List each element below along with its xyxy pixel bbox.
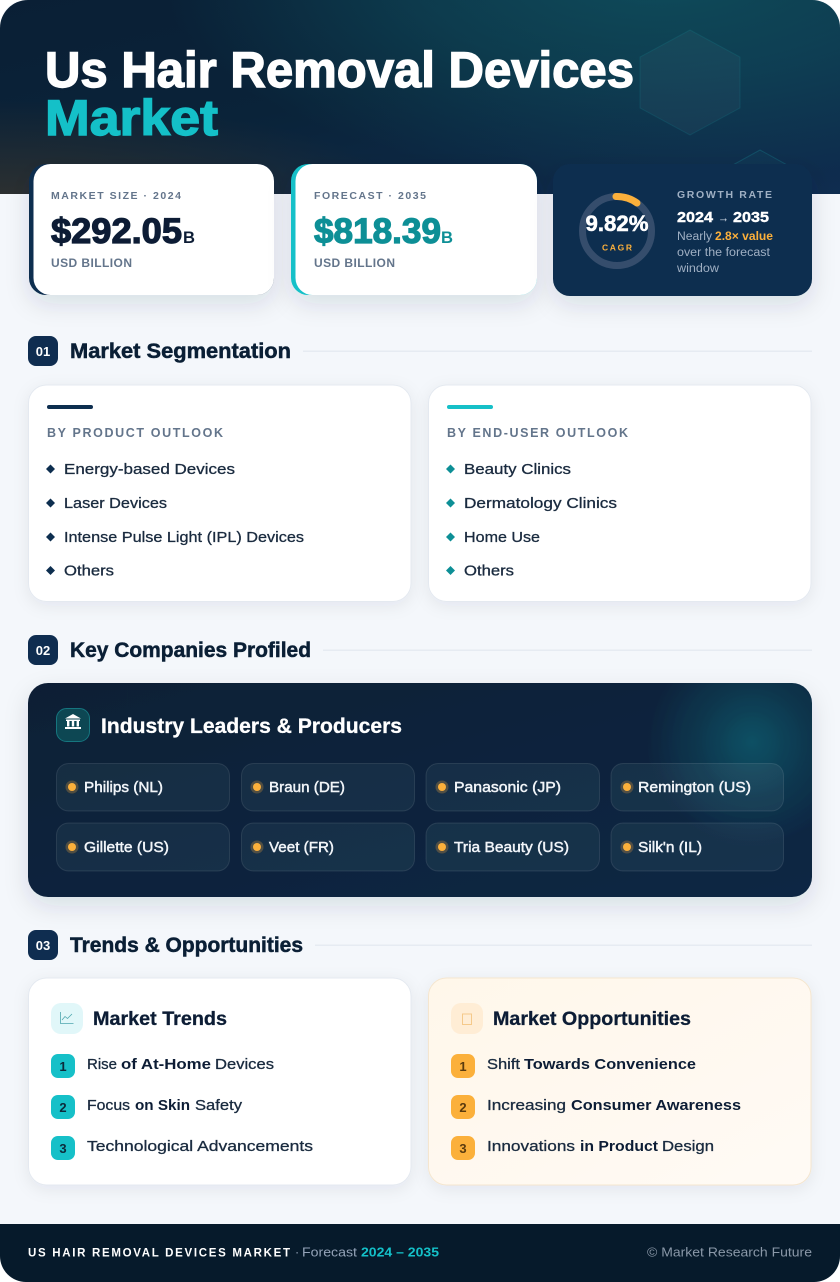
stat card: growth rate: window (676, 263, 720, 275)
panel: by end-user outlook (428, 385, 811, 602)
company chip: Silk'n: Silk'n (IL) (638, 840, 702, 856)
trend 3 (51, 1136, 313, 1160)
panel: market trends (28, 978, 411, 1185)
list: end-user items: Home Use (464, 529, 540, 546)
trend 2: 2 (59, 1100, 67, 1115)
section heading: market segmentation (28, 336, 812, 366)
section heading: market segmentation: 01 (36, 344, 50, 359)
section heading: key companies: Key Companies Profiled (70, 639, 311, 662)
CAGR ring (582, 196, 652, 266)
stat card: growth rate (553, 164, 812, 296)
list: product items: Others (64, 562, 114, 580)
opportunity 1 (451, 1054, 696, 1078)
icon: chart (51, 1003, 83, 1034)
CAGR ring: CAGR (602, 242, 632, 252)
list: end-user items (446, 461, 617, 580)
CAGR ring: 9.82% (586, 211, 648, 236)
trend 2: on Skin (135, 1097, 190, 1114)
stat card: market size: $292.05 (51, 212, 182, 251)
company chip: Silk'n (611, 823, 784, 871)
company chip: Philips: Philips (NL) (84, 780, 163, 796)
company chip: Philips (56, 764, 230, 811)
opportunity 3: Innovations (487, 1138, 575, 1155)
footer: US HAIR REMOVAL DEVICES MARKET (28, 1248, 290, 1260)
stat card: market size: USD BILLION (51, 256, 132, 270)
stat card: forecast: FORECAST · 2035 (314, 190, 426, 202)
opportunity 3: in Product (580, 1138, 658, 1155)
company chip: Gillette: Gillette (US) (84, 840, 169, 856)
list: product items: Laser Devices (64, 495, 167, 512)
panel: by product outlook: BY PRODUCT OUTLOOK (47, 426, 223, 440)
trend 1: Devices (215, 1056, 274, 1073)
company chip: Panasonic: Panasonic (JP) (454, 780, 561, 796)
footer: 2024 – 2035 (361, 1246, 439, 1260)
section heading: key companies (28, 635, 812, 665)
stat card: growth rate: → (718, 210, 729, 225)
company chip: Gillette (56, 823, 230, 871)
panel: market opportunities: Market Opportunities (493, 1008, 691, 1030)
trend 1: 1 (59, 1059, 67, 1074)
company chip: Veet: Veet (FR) (269, 840, 334, 856)
stat card: market size: B (183, 228, 195, 247)
icon: institution (56, 708, 90, 742)
panel: industry leaders (28, 683, 812, 897)
stat card: growth rate: over the forecast (677, 247, 771, 259)
opportunity 1: 1 (459, 1059, 467, 1074)
company chip: Remington: Remington (US) (638, 780, 751, 796)
stat card: forecast (291, 164, 537, 295)
section heading: market segmentation: Market Segmentation (70, 340, 291, 363)
stat card: growth rate: 2035 (733, 209, 769, 226)
title (45, 42, 634, 146)
opportunity 1: Shift (487, 1056, 521, 1073)
trend 3: 3 (59, 1141, 67, 1156)
stat card: forecast: USD BILLION (314, 256, 395, 270)
title: Us Hair Removal Devices (45, 42, 634, 98)
stat card: forecast: $818.39 (314, 212, 441, 251)
company chip: Braun (242, 764, 414, 811)
footer: Forecast (302, 1246, 358, 1260)
trend 3: Technological Advancements (87, 1138, 313, 1155)
list: end-user items: Dermatology Clinics (464, 495, 617, 512)
stat card: growth rate: Nearly (677, 231, 712, 243)
section heading: trends and opportunities: Trends & Opportunities (70, 934, 303, 957)
opportunity 2: Consumer Awareness (571, 1097, 741, 1114)
company chip: Braun: Braun (DE) (269, 780, 345, 796)
list: product items: Energy-based Devices (64, 461, 235, 478)
trend 2: Safety (195, 1097, 243, 1114)
header banner (0, 0, 840, 194)
panel: by end-user outlook: BY END-USER OUTLOOK (447, 426, 628, 440)
footer: © Market Research Future (647, 1246, 812, 1260)
opportunity 2: Increasing (487, 1097, 566, 1114)
footer (0, 1224, 840, 1282)
stat card: market size: MARKET SIZE · 2024 (51, 190, 181, 202)
company chip: Remington (611, 764, 784, 811)
panel: market trends: Market Trends (93, 1008, 227, 1030)
opportunity 3: 3 (459, 1141, 467, 1156)
trend 1: Rise (87, 1056, 117, 1073)
section heading: key companies: 02 (36, 643, 50, 658)
panel: industry leaders: Industry Leaders & Producers (101, 715, 402, 738)
list: product items: Intense Pulse Light (IPL) Devices (64, 529, 304, 546)
panel: market opportunities (428, 978, 811, 1185)
company chip: Tria Beauty (426, 823, 600, 871)
list: product items (46, 461, 304, 580)
stat card: growth rate: 2.8× value (715, 231, 773, 243)
stat card: forecast: B (441, 228, 453, 247)
opportunity 1: Towards Convenience (524, 1056, 696, 1073)
company chip: Tria Beauty: Tria Beauty (US) (454, 840, 569, 856)
trend 2 (51, 1095, 243, 1119)
section heading: trends and opportunities (28, 930, 812, 960)
stat card: growth rate: 2024 (677, 209, 714, 226)
trend 1: of At-Home (121, 1056, 211, 1073)
section heading: trends and opportunities: 03 (36, 938, 50, 953)
trend 1 (51, 1054, 274, 1078)
list: end-user items: Others (464, 562, 514, 580)
company chip: Veet (242, 823, 414, 871)
list: end-user items: Beauty Clinics (464, 461, 571, 478)
title: Market (45, 90, 218, 146)
opportunity 3 (451, 1136, 714, 1160)
opportunity 2 (451, 1095, 741, 1119)
icon: placeholder box (451, 1003, 483, 1034)
stat card: market size (29, 164, 274, 295)
stat card: growth rate: GROWTH RATE (677, 189, 772, 201)
footer: · (295, 1246, 299, 1260)
opportunity 2: 2 (459, 1100, 467, 1115)
company chip: Panasonic (426, 764, 600, 811)
panel: by product outlook (28, 385, 411, 602)
trend 2: Focus (87, 1097, 130, 1114)
opportunity 3: Design (662, 1138, 714, 1155)
